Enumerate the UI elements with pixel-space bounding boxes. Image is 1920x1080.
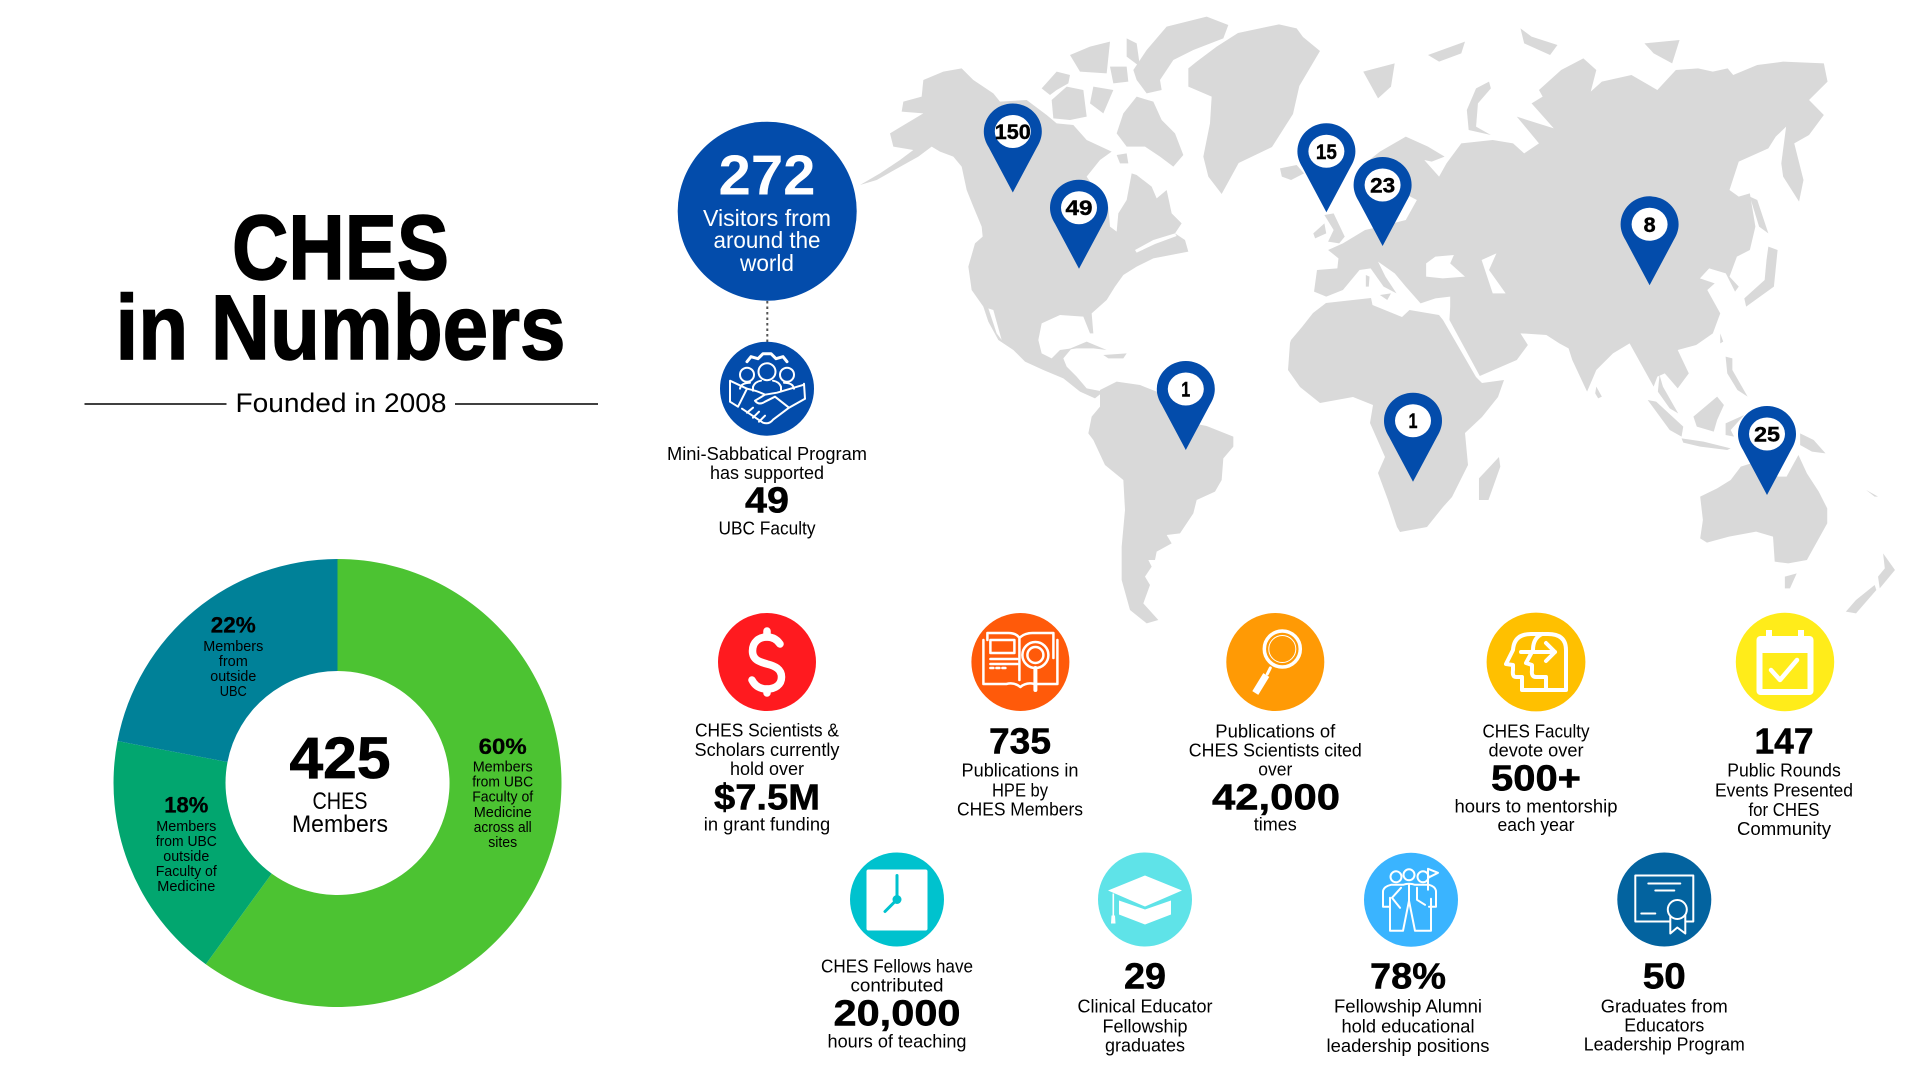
map pin: 1 South America: 1 (1181, 378, 1191, 402)
label: 18%: Members (156, 818, 216, 835)
label: 22%: outside (210, 668, 256, 685)
stat: teaching hours (821, 852, 973, 1051)
panel: 272 visitors: world (739, 250, 794, 276)
panel: mini-sabbatical: UBC Faculty (718, 518, 816, 538)
title (116, 197, 566, 379)
map pin: 49: 49 (1066, 197, 1092, 220)
panel: mini-sabbatical (667, 342, 867, 538)
map pin: 8 (1621, 196, 1679, 285)
stat: public rounds: 147 (1754, 720, 1814, 761)
stat: publications: 735 (989, 720, 1051, 761)
icon: open book with magnifier (983, 633, 1057, 690)
stat: fellowship alumni: Fellowship Alumni (1334, 997, 1482, 1017)
stat: clinical educator fellowship: graduates (1105, 1036, 1185, 1056)
donut centre total: CHES (312, 788, 368, 815)
icon: magnifying glass (1255, 631, 1300, 693)
label: 60%: Medicine (474, 804, 532, 821)
icon: graduation cap (1108, 876, 1182, 924)
stat: grant funding: in grant funding (704, 815, 830, 835)
stat: grant funding: $7.5M (714, 776, 820, 817)
map pin: 23: 23 (1370, 174, 1395, 198)
label: 60%: Members (473, 759, 533, 776)
label: 18%: Faculty of (156, 863, 218, 880)
map pin: 1 South America (1157, 361, 1215, 450)
stat: mentorship: 500+ (1491, 758, 1581, 799)
donut centre total (290, 726, 390, 838)
stat: clinical educator fellowship (1078, 852, 1213, 1056)
stat: publications: HPE by (992, 781, 1048, 801)
icon: calendar with check (1756, 630, 1814, 695)
stat: citations: 42,000 (1212, 776, 1340, 817)
stat: mentorship: CHES Faculty (1482, 722, 1590, 742)
stat: clinical educator fellowship: Clinical Educator (1078, 997, 1213, 1017)
label: 18%: from UBC (156, 833, 217, 850)
map pin: 15: 15 (1316, 141, 1337, 164)
panel: mini-sabbatical: 49 (745, 479, 789, 520)
donut centre total: 425 (290, 726, 390, 791)
stat: publications: CHES Members (957, 800, 1083, 820)
map: North America and Greenland (860, 17, 1320, 398)
donut chart: CHES members (114, 559, 561, 1007)
label: 22%: from (219, 653, 248, 670)
map pin: 23 (1354, 157, 1412, 246)
stat: fellowship alumni: 78% (1370, 955, 1446, 996)
title: in Numbers (116, 277, 566, 379)
stat: teaching hours: CHES Fellows have (821, 957, 973, 977)
label: 18%: outside (163, 848, 209, 865)
map pin: 15 (1297, 123, 1355, 212)
stat: fellowship alumni: hold educational (1342, 1017, 1474, 1037)
stat: citations: times (1254, 815, 1297, 835)
stat: mentorship: hours to mentorship (1454, 797, 1618, 817)
stat: mentorship (1454, 613, 1618, 835)
stat: grant funding (694, 613, 840, 835)
stat: citations: Publications of (1215, 721, 1336, 741)
title: CHES (232, 197, 449, 299)
panel: mini-sabbatical: Mini-Sabbatical Program (667, 444, 867, 464)
map pin: 150 (984, 104, 1042, 192)
stat: educators leadership program: 50 (1643, 955, 1686, 996)
stat: citations (1189, 613, 1362, 835)
map: Eurasia (1280, 28, 1828, 398)
map pin: 25: 25 (1754, 424, 1780, 446)
stat: citations: CHES Scientists cited (1189, 741, 1362, 761)
stat: teaching hours: 20,000 (834, 993, 960, 1034)
stat: educators leadership program: Graduates from (1601, 997, 1728, 1017)
icon: dollar sign (752, 631, 782, 693)
icon: two heads with arrow (1506, 634, 1566, 690)
map pin: 150: 150 (995, 121, 1031, 144)
stat: public rounds (1715, 613, 1853, 839)
panel: 272 visitors: 272 (718, 143, 816, 207)
stat: public rounds: for CHES (1748, 800, 1820, 820)
map pin: 25 (1738, 406, 1796, 495)
icon: alumni group with flag (1383, 869, 1438, 931)
stat: fellowship alumni: leadership positions (1326, 1036, 1490, 1056)
map: Southeast Asia and Oceania (1479, 357, 1895, 613)
map: South America (1088, 382, 1233, 623)
panel: 272 visitors: around the (714, 227, 820, 253)
label: 60%: from UBC (472, 774, 533, 791)
stat: grant funding: hold over (730, 759, 804, 779)
label: 18%: Medicine (157, 878, 215, 895)
label: 18%: 18% (164, 792, 208, 817)
map pin: 1 Africa (1384, 393, 1442, 482)
label: 60% (472, 734, 534, 851)
stat: citations: over (1258, 760, 1292, 780)
dotted connector (766, 301, 768, 346)
stat: public rounds: Events Presented (1715, 781, 1853, 801)
icon: clock (866, 870, 928, 930)
label: 22%: UBC (220, 683, 247, 700)
label: 18% (156, 792, 218, 895)
slice: 22% outside UBC (118, 559, 338, 762)
label: 60%: Faculty of (472, 789, 534, 806)
label: 60%: across all (474, 819, 532, 836)
stat: grant funding: Scholars currently (694, 740, 840, 760)
panel: 272 visitors (678, 122, 857, 301)
slice: 60% UBC Faculty of Medicine (206, 559, 561, 1007)
stat: educators leadership program (1584, 852, 1745, 1055)
slice: 18% UBC outside Faculty of Medicine (114, 741, 272, 964)
stat: public rounds: Community (1737, 819, 1831, 839)
stat: teaching hours: contributed (850, 976, 944, 996)
donut centre total: Members (292, 811, 388, 838)
panel: mini-sabbatical: has supported (710, 463, 824, 483)
stat: clinical educator fellowship: 29 (1124, 955, 1166, 996)
world map (860, 17, 1895, 623)
stat: educators leadership program: Leadership Program (1584, 1035, 1745, 1055)
label: 60%: 60% (479, 734, 527, 759)
icon: handshake with people and gear (730, 354, 805, 423)
stat: grant funding: CHES Scientists & (695, 721, 839, 741)
label: 22%: Members (203, 638, 263, 655)
stat: public rounds: Public Rounds (1727, 761, 1841, 781)
label: 22% (203, 613, 263, 700)
stat: mentorship: each year (1498, 815, 1574, 835)
label: 60%: sites (488, 834, 517, 851)
map pin: 49 (1050, 180, 1108, 269)
map: Africa (1288, 298, 1504, 532)
stat: educators leadership program: Educators (1624, 1016, 1704, 1036)
label: 22%: 22% (211, 613, 256, 638)
stat: teaching hours: hours of teaching (828, 1031, 966, 1051)
stat: mentorship: devote over (1488, 741, 1584, 761)
map pin: 8: 8 (1644, 214, 1656, 237)
stat: clinical educator fellowship: Fellowship (1102, 1017, 1188, 1037)
stat: publications: Publications in (962, 761, 1078, 781)
stat: publications (957, 613, 1083, 820)
stat: fellowship alumni (1326, 853, 1490, 1056)
subtitle: founded in 2008: Founded in 2008 (236, 388, 446, 418)
map pin: 1 Africa: 1 (1408, 410, 1418, 433)
panel: 272 visitors: Visitors from (703, 205, 831, 231)
icon: certificate (1635, 876, 1693, 934)
